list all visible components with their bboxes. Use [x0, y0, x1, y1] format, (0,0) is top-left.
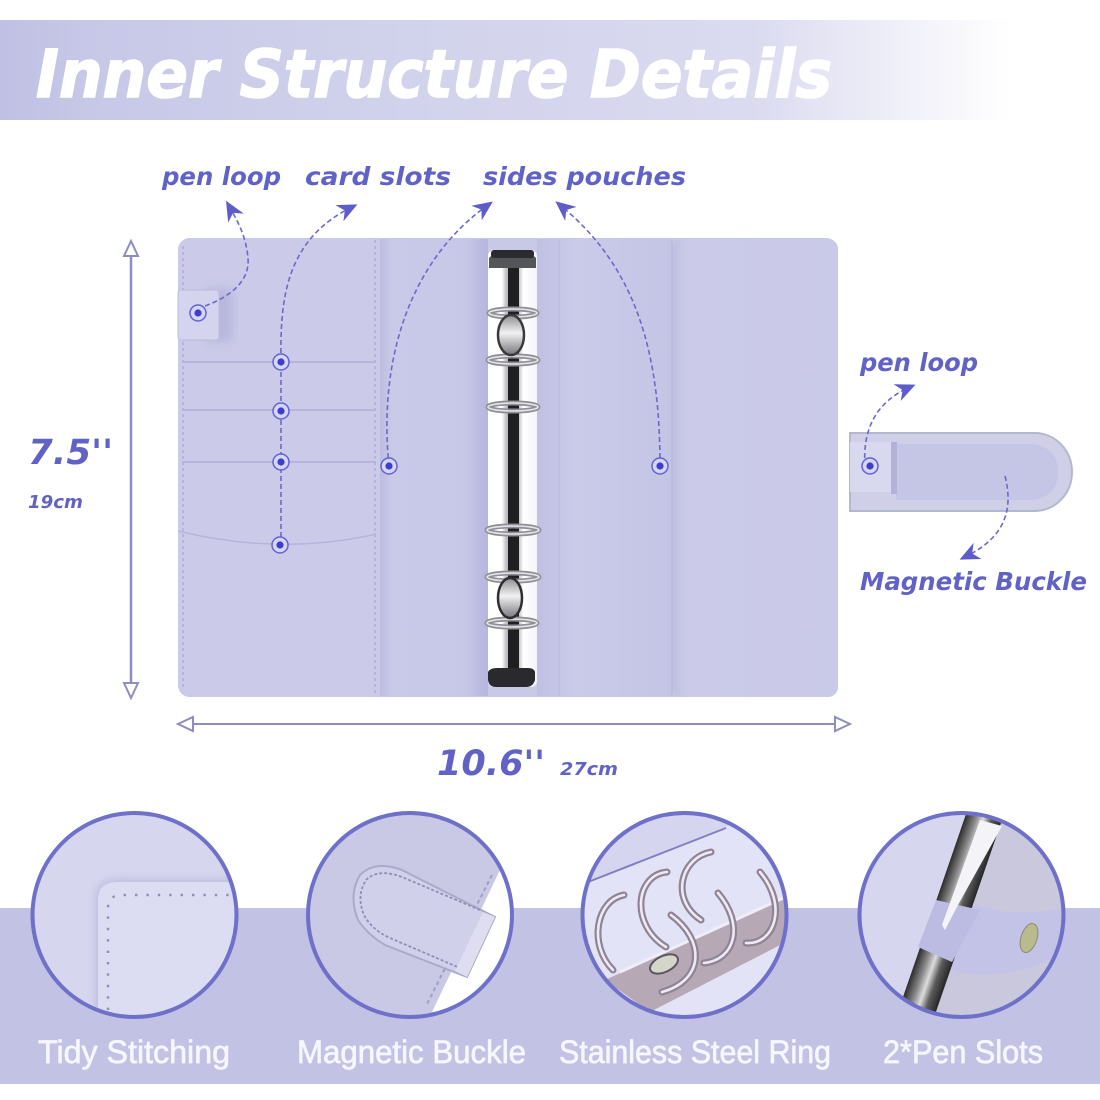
- right side pouch: [537, 239, 672, 696]
- caption: stainless steel ring: Stainless Steel Ring: [559, 1034, 831, 1070]
- ring binder mechanism: [487, 250, 539, 687]
- caption: magnetic buckle: Magnetic Buckle: [297, 1034, 526, 1070]
- caption: tidy stitching: Tidy Stitching: [38, 1034, 230, 1070]
- detail circle: stainless steel ring: [580, 810, 790, 1020]
- detail circle: tidy stitching: [30, 810, 240, 1020]
- label: pen loop right: pen loop: [859, 348, 978, 377]
- left side pouch: [380, 239, 488, 696]
- label: card slots: card slots: [305, 162, 451, 191]
- left card panel: [178, 238, 380, 697]
- header band: [0, 20, 1100, 120]
- callout markers: [190, 305, 878, 553]
- caption: pen slots: 2*Pen Slots: [883, 1034, 1043, 1070]
- left pen loop: [178, 288, 233, 342]
- label: magnetic buckle: Magnetic Buckle: [860, 567, 1087, 596]
- planner body: [178, 238, 838, 697]
- detail circle: pen slots: [858, 811, 1066, 1019]
- label: pen loop: pen loop: [161, 162, 281, 191]
- detail circle: magnetic buckle: [305, 810, 520, 1020]
- width dimension arrow: [178, 717, 850, 731]
- right large panel: [672, 239, 838, 697]
- bottom band: [0, 908, 1100, 1084]
- label: sides pouches: sides pouches: [483, 162, 686, 191]
- height metric value: 19cm: [28, 492, 83, 513]
- planner diagram: [178, 238, 1072, 697]
- width value: 10.6'': [437, 744, 545, 784]
- title: Inner Structure Details: [36, 36, 832, 113]
- height dimension arrow: [124, 241, 138, 698]
- height value: 7.5'': [28, 433, 113, 473]
- callout leader lines: [205, 205, 1008, 557]
- width metric value: 27cm: [560, 759, 618, 780]
- magnetic strap: [850, 433, 1072, 511]
